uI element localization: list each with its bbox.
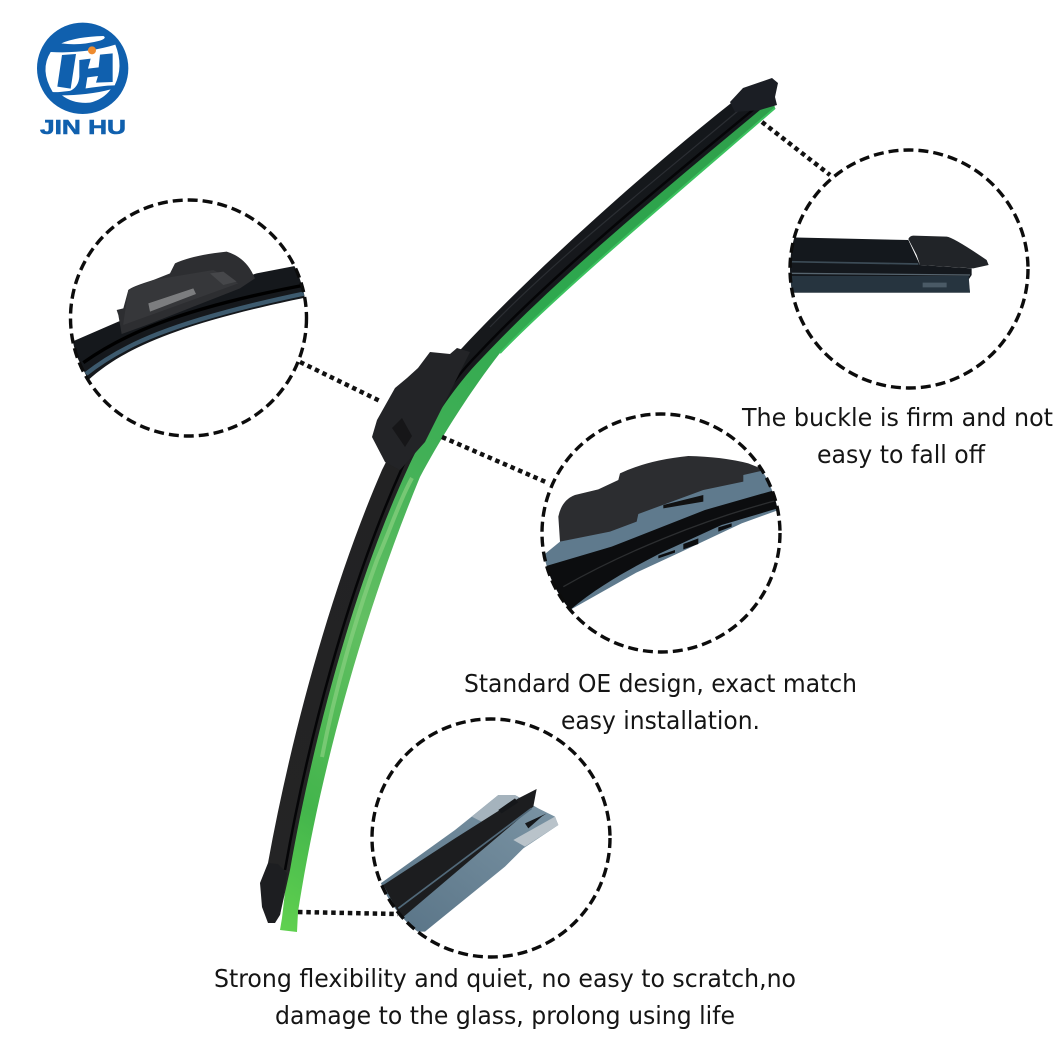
caption: flexibility: damage to the glass, prolong using life bbox=[275, 1001, 735, 1030]
detail circle: centre buckle outer bbox=[70, 200, 310, 436]
centre buckle bbox=[372, 348, 470, 470]
caption: buckle: The buckle is firm and not bbox=[741, 403, 1053, 432]
wiper blade bbox=[260, 78, 778, 932]
end cap: bottom bbox=[260, 863, 287, 923]
caption: buckle: easy to fall off bbox=[817, 440, 986, 469]
dotted leader lines bbox=[298, 122, 830, 914]
detail circle: top end cap bbox=[787, 150, 1028, 388]
green lighter edge bbox=[500, 108, 775, 353]
green rubber strip bbox=[280, 96, 775, 932]
detail circle: bottom end bbox=[372, 719, 610, 957]
caption: flexibility: Strong flexibility and quiet, no easy to scratch,no bbox=[214, 964, 796, 993]
frame groove bbox=[285, 100, 765, 870]
caption: OE design: easy installation. bbox=[561, 706, 760, 735]
frame ridge bbox=[490, 105, 745, 327]
caption: OE design bbox=[464, 669, 857, 735]
detail circle: centre buckle inner bbox=[542, 414, 783, 652]
green light stripe bbox=[322, 478, 412, 757]
logo: Jin Hu bbox=[37, 23, 128, 139]
logo: Jin Hu: JIN HU bbox=[40, 117, 126, 139]
caption: buckle bbox=[741, 403, 1053, 469]
caption: flexibility bbox=[214, 964, 796, 1030]
caption: OE design: Standard OE design, exact match bbox=[464, 669, 857, 698]
end cap: top bbox=[730, 78, 778, 112]
black frame bbox=[268, 92, 772, 915]
